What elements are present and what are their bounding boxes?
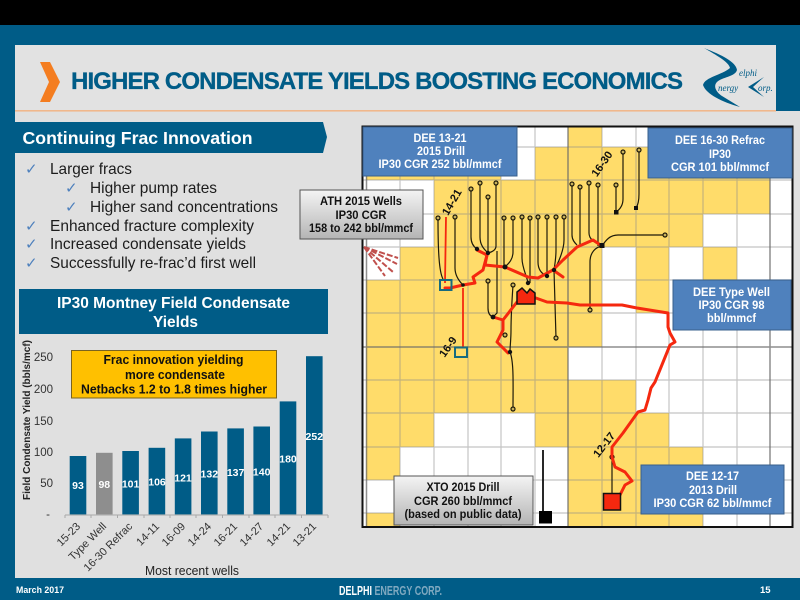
bullet list: Successfully re-frac’d first well <box>50 255 256 272</box>
callout: DEE 13-21: IP30 CGR 252 bbl/mmcf <box>378 159 502 171</box>
callout: XTO 2015 Drill <box>394 476 533 525</box>
well labels <box>437 149 618 460</box>
callout: DEE Type Well: IP30 CGR 98 <box>698 300 765 312</box>
map <box>362 126 792 527</box>
value labels: 121 <box>174 472 192 484</box>
bullet list: ✓ <box>25 235 38 253</box>
value labels: 140 <box>253 466 271 478</box>
bullet list: Increased condensate yields <box>50 236 246 253</box>
callout: DEE 12-17: IP30 CGR 62 bbl/mmcf <box>654 498 772 510</box>
section banner: Continuing Frac Innovation <box>15 122 327 153</box>
logo: Delphi Energy Corp.: elphi <box>739 68 757 78</box>
logo: Delphi Energy Corp.: orp. <box>758 83 773 93</box>
callout: DEE 12-17: DEE 12-17 <box>686 471 739 483</box>
pipelines: red <box>445 217 675 500</box>
x axis labels: 16-30 Refrac <box>82 520 135 574</box>
chart heading: Yields <box>153 314 198 331</box>
callout: DEE Type Well: bbl/mmcf <box>707 313 756 325</box>
bars <box>70 356 323 514</box>
y axis labels: - <box>46 509 50 521</box>
callout: DEE 12-17 <box>641 465 784 514</box>
callout: XTO 2015 Drill: (based on public data) <box>404 509 522 521</box>
x axis labels: 14-21 <box>265 521 293 549</box>
XTO well <box>539 450 552 524</box>
value labels: 137 <box>227 467 245 479</box>
well labels: 16-9 <box>437 335 460 360</box>
x axis labels: 13-21 <box>291 521 319 549</box>
value labels <box>72 431 323 492</box>
chart heading: IP30 Montney Field Condensate <box>57 295 290 312</box>
x axis labels: 14-11 <box>134 521 162 548</box>
callout: frac innovation: Netbacks 1.2 to 1.8 times higher <box>81 382 267 396</box>
value labels: 93 <box>72 480 84 492</box>
x axis labels: 15-23 <box>55 521 83 549</box>
well labels: 12-17 <box>591 430 618 460</box>
value labels: 106 <box>148 476 166 488</box>
callout: frac innovation: Frac innovation yielding <box>104 353 244 367</box>
callout: DEE 16-30 Refrac <box>648 128 792 178</box>
bullet list: ✓ <box>65 198 78 216</box>
callout: DEE 16-30 Refrac: CGR 101 bbl/mmcf <box>671 162 769 174</box>
callout: DEE 16-30 Refrac: IP30 <box>709 149 731 161</box>
x axis title: Most recent wells <box>145 563 239 578</box>
title: HIGHER CONDENSATE YIELDS BOOSTING ECONOMICS <box>71 68 683 95</box>
callout: DEE 13-21 <box>363 127 517 176</box>
bullet list: Higher pump rates <box>90 180 217 197</box>
y axis labels: 250 <box>34 352 53 364</box>
callout: DEE 13-21: DEE 13-21 <box>414 133 467 145</box>
callout: DEE Type Well <box>673 280 791 330</box>
x axis labels <box>55 520 319 574</box>
bullet list: ✓ <box>65 179 78 197</box>
x axis labels: 16-09 <box>160 521 188 549</box>
callout: frac innovation <box>72 350 276 398</box>
callout: DEE Type Well: DEE Type Well <box>693 287 770 299</box>
x axis labels: 16-21 <box>212 521 240 549</box>
well trajectories <box>436 148 667 498</box>
y axis labels: 150 <box>34 416 53 428</box>
y axis title: Field Condensate Yield (bbls/mcf) <box>21 340 33 500</box>
value labels: 252 <box>306 431 323 443</box>
footer <box>16 583 771 598</box>
teal well markers <box>440 280 467 357</box>
callout: DEE 13-21: 2015 Drill <box>417 146 465 158</box>
map land grid <box>362 126 792 527</box>
footer: DELPHI ENERGY CORP. <box>339 583 442 598</box>
icon: title chevron <box>40 62 60 102</box>
bullet list: ✓ <box>25 160 38 178</box>
callout: ATH 2015 Wells <box>300 190 423 239</box>
bullet list: ✓ <box>25 217 38 235</box>
callout: ATH 2015 Wells: 158 to 242 bbl/mmcf <box>309 223 413 235</box>
y axis labels: 50 <box>40 478 53 490</box>
chart heading <box>19 289 328 334</box>
x axis <box>65 515 328 518</box>
footer: 15 <box>760 585 771 596</box>
x axis labels: 14-24 <box>186 521 214 549</box>
x axis labels: Type Well <box>67 521 109 563</box>
bullet list: Higher sand concentrations <box>90 199 278 216</box>
logo: Delphi Energy Corp.: nergy <box>718 83 738 93</box>
bar chart: field condensate yield <box>21 340 328 578</box>
footer: March 2017 <box>16 585 64 596</box>
y axis labels: 200 <box>34 384 53 396</box>
x axis labels: 14-27 <box>238 521 266 549</box>
bullet list: ✓ <box>25 254 38 272</box>
well labels: 16-30 <box>590 149 616 179</box>
callout: ATH 2015 Wells: IP30 CGR <box>336 210 387 222</box>
value labels: 180 <box>279 454 297 466</box>
value labels: 101 <box>122 478 140 490</box>
y axis labels <box>34 352 53 521</box>
bullet list <box>25 160 278 272</box>
callout: frac innovation: more condensate <box>125 368 225 382</box>
bullet list: Enhanced fracture complexity <box>50 218 254 235</box>
map frame <box>362 126 792 527</box>
callout: XTO 2015 Drill: XTO 2015 Drill <box>426 482 500 494</box>
ATH dashed arrows <box>364 247 398 276</box>
y axis labels: 100 <box>34 447 53 459</box>
logo: Delphi Energy Corp. <box>703 48 773 107</box>
callout: DEE 12-17: 2013 Drill <box>689 485 737 497</box>
well labels: 14-21 <box>440 187 465 218</box>
callout: XTO 2015 Drill: CGR 260 bbl/mmcf <box>414 496 512 508</box>
callout: ATH 2015 Wells: ATH 2015 Wells <box>320 196 402 208</box>
value labels: 132 <box>201 468 218 480</box>
callout: DEE 16-30 Refrac: DEE 16-30 Refrac <box>675 135 766 147</box>
bullet list: Larger fracs <box>50 161 132 178</box>
section banner: Continuing Frac Innovation: Continuing Frac Innovation <box>22 128 252 148</box>
value labels: 98 <box>98 479 110 491</box>
well pads <box>461 206 638 510</box>
